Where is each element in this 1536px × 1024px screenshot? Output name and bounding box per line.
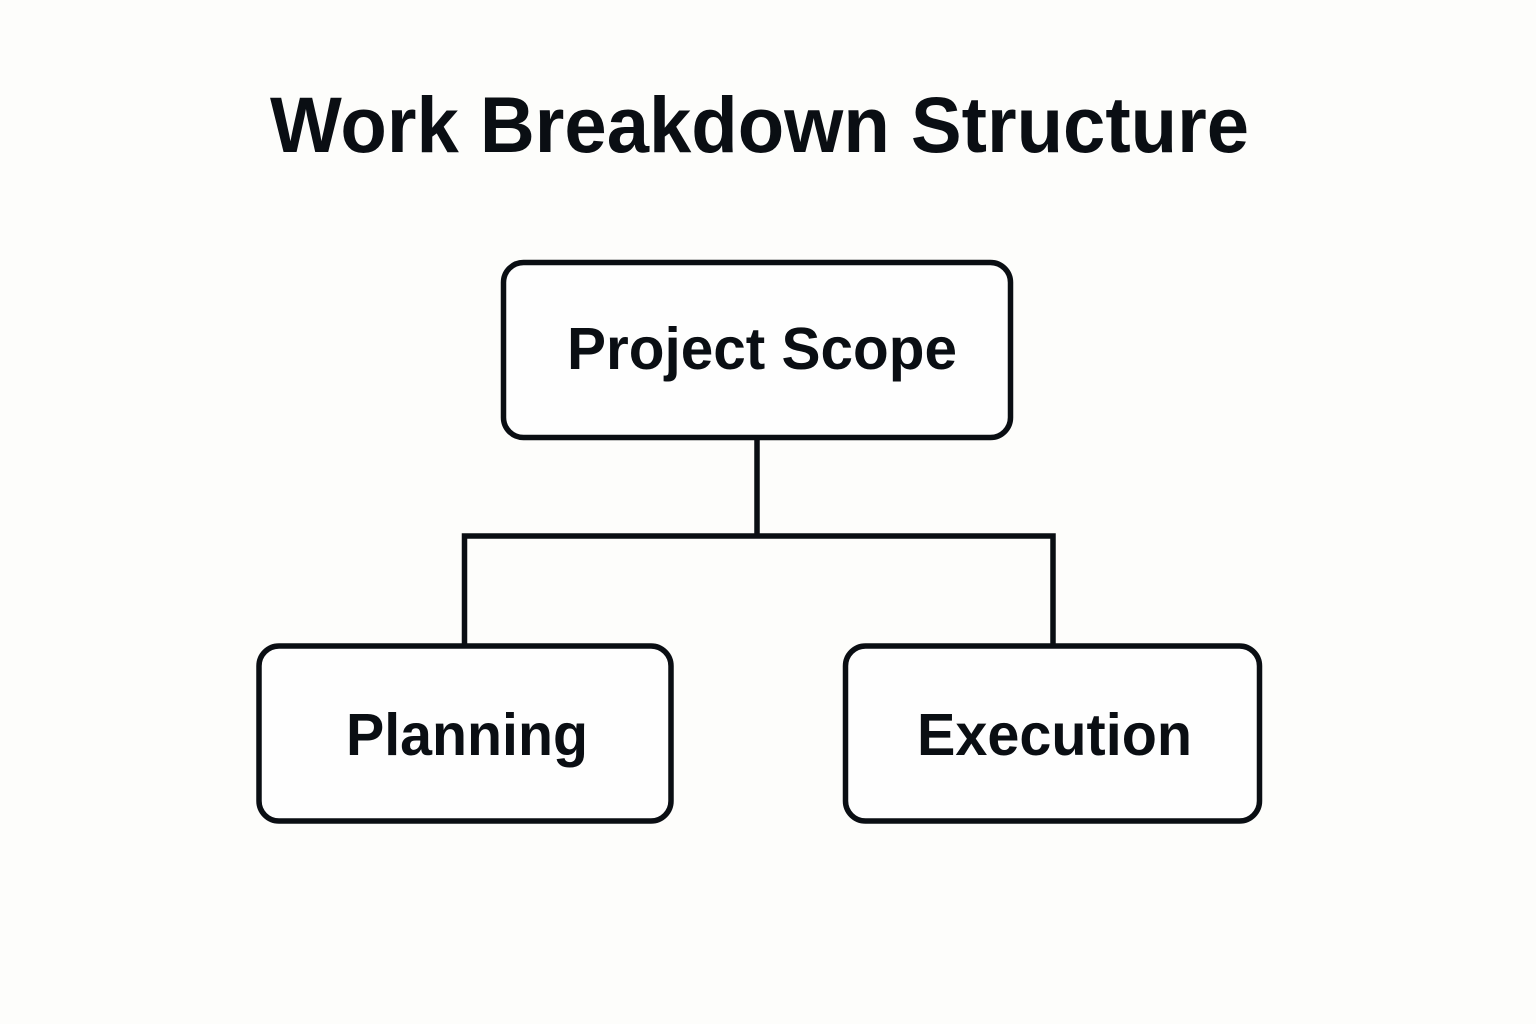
box: Project Scope [504,262,1010,438]
box: Planning [259,646,671,821]
box: Execution: Execution [917,702,1192,768]
box: Planning: Planning [346,702,588,768]
box: Project Scope: Project Scope [567,316,957,382]
title: Work Breakdown Structure [270,80,1249,169]
box: Execution [846,646,1260,821]
connector lines [464,437,1053,646]
